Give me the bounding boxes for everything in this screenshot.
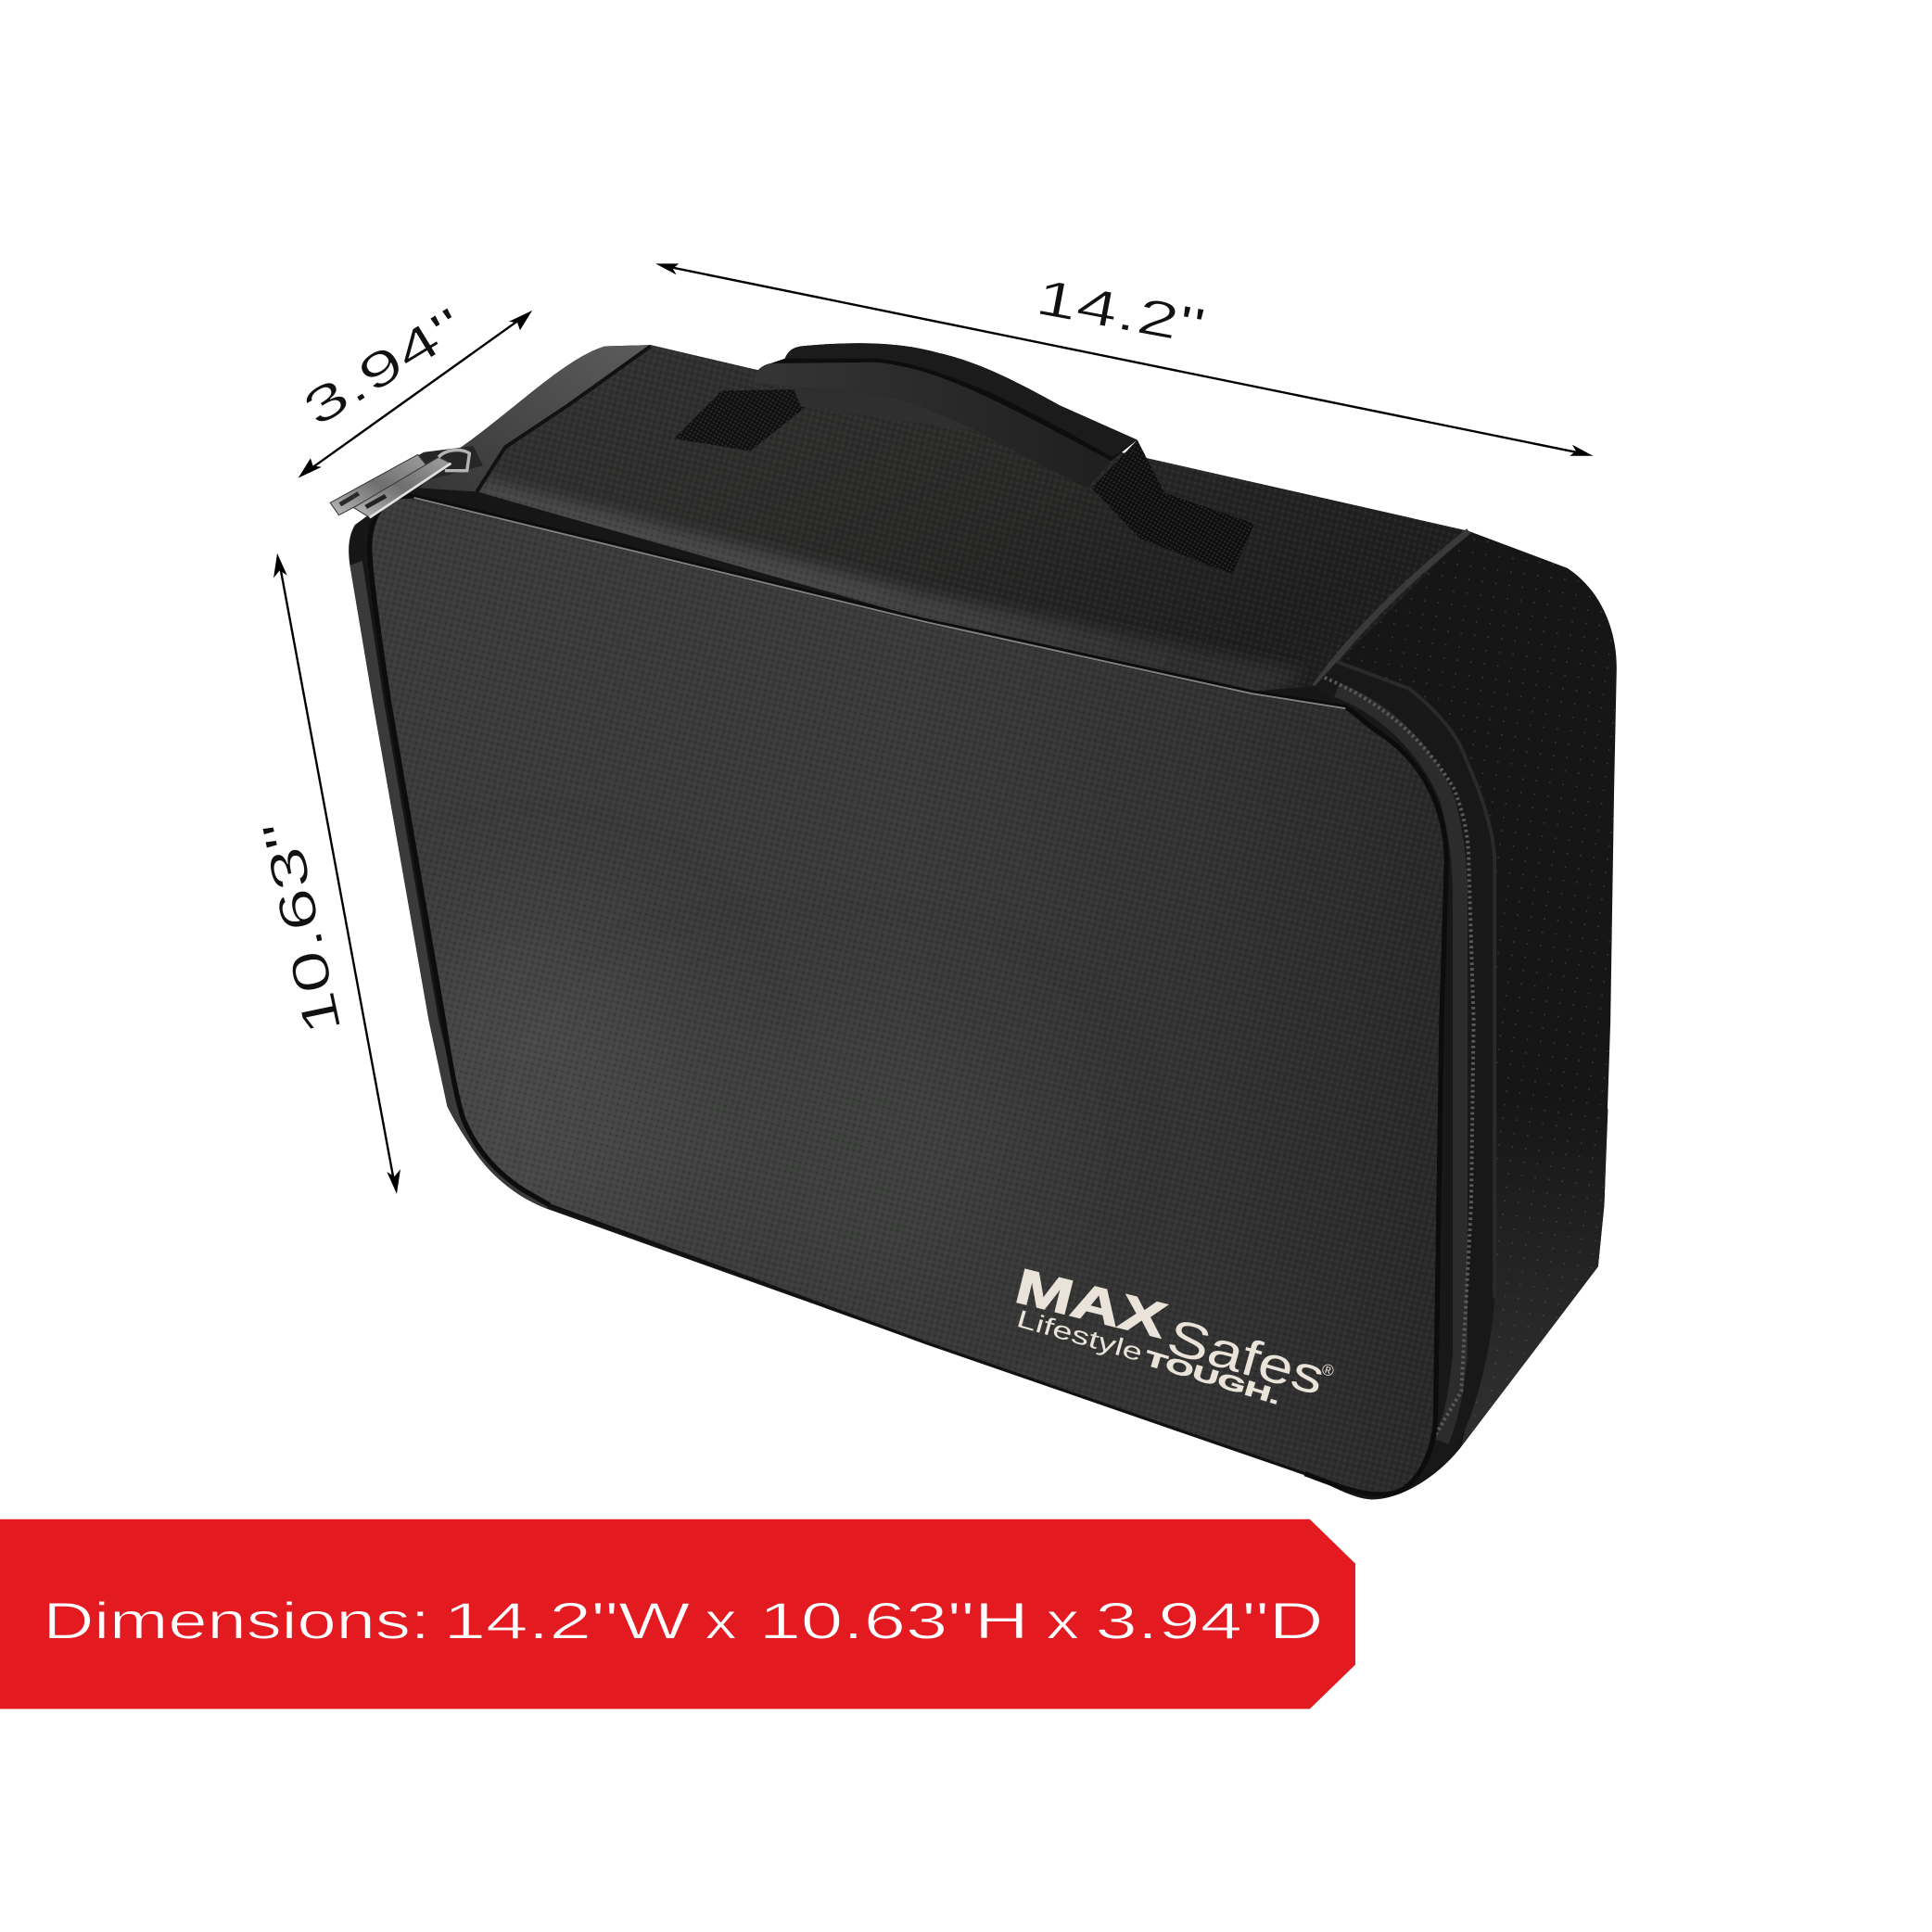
right strap weave xyxy=(1092,439,1254,574)
slider ring xyxy=(439,451,469,471)
red dimensions banner xyxy=(0,1519,1355,1709)
zipper teeth xyxy=(1325,678,1474,1467)
banner shape xyxy=(0,1519,1355,1709)
handle backing xyxy=(753,343,1138,488)
top panel lighting xyxy=(479,347,1463,691)
width arrow head right xyxy=(1570,445,1594,456)
dimension: depth 3.94 inches xyxy=(294,298,532,478)
left strap of handle xyxy=(674,389,805,451)
right seam xyxy=(1315,531,1468,686)
depth arrow xyxy=(299,311,532,478)
slider body xyxy=(401,446,483,480)
lower side panel lighter weave xyxy=(1461,1109,1608,1446)
width arrow xyxy=(655,263,1594,456)
width arrow head left xyxy=(655,263,679,274)
height arrow xyxy=(273,553,400,1194)
width value: 14.2"W xyxy=(443,1592,691,1650)
handle front grip xyxy=(753,362,1112,488)
pull two edge highlight xyxy=(370,464,451,517)
banner text xyxy=(44,1592,1323,1650)
second multiply sign: x xyxy=(1046,1592,1079,1650)
outer zipper seam xyxy=(1337,662,1494,1298)
front panel xyxy=(370,496,1446,1494)
zipper tape highlight xyxy=(1337,690,1460,1442)
front piping xyxy=(370,496,1446,1494)
registered mark: ® xyxy=(1320,1359,1336,1380)
front panel weave xyxy=(357,480,1467,1516)
depth arrow line xyxy=(308,317,524,471)
Lifestyle: Lifestyle xyxy=(1014,1304,1146,1366)
pull one xyxy=(330,454,429,515)
MAX: MAX xyxy=(1010,1259,1172,1349)
depth arrow head lower xyxy=(299,458,322,478)
left edge band xyxy=(350,561,550,1209)
height arrow head top xyxy=(273,553,287,578)
zipper band xyxy=(1315,662,1494,1493)
depth label: 3.94" xyxy=(294,298,474,437)
left strap weave xyxy=(674,389,805,451)
TOUGH.: TOUGH. xyxy=(1142,1346,1283,1409)
zipper pulls xyxy=(330,446,483,517)
height label: 10.63" xyxy=(250,816,352,1040)
side panel texture xyxy=(1337,531,1617,1446)
piping highlight xyxy=(414,498,1345,708)
Dimensions label: Dimensions: xyxy=(44,1592,430,1650)
lower-left highlight xyxy=(443,946,640,1224)
height value: 10.63"H xyxy=(759,1592,1029,1650)
lower-centre highlight xyxy=(579,1023,1048,1269)
width label: 14.2" xyxy=(1032,268,1209,355)
front panel lighting xyxy=(357,480,1467,1516)
surface under handle arc xyxy=(789,375,998,434)
height arrow line xyxy=(280,565,394,1183)
right strap of handle xyxy=(1092,439,1254,574)
pull two slot xyxy=(364,494,387,509)
product: black document bag xyxy=(330,333,1617,1516)
infographic canvas xyxy=(0,263,1617,1710)
pull two xyxy=(353,457,451,517)
width arrow line xyxy=(666,266,1582,453)
top panel weave xyxy=(468,333,1479,703)
logo xyxy=(1010,1259,1336,1409)
depth arrow head upper xyxy=(509,311,532,330)
dimension: width 14.2 inches xyxy=(655,263,1594,456)
handle rear ridge xyxy=(785,343,1138,457)
height arrow head bottom xyxy=(387,1169,400,1194)
bag silhouette and right side panel xyxy=(349,345,1617,1499)
pull one slot xyxy=(338,491,360,506)
multiply sign: x xyxy=(705,1592,737,1650)
depth value: 3.94"D xyxy=(1096,1592,1323,1650)
left end strip xyxy=(419,345,651,491)
glossy band along piping xyxy=(477,477,1306,708)
front bottom edge xyxy=(550,1205,1304,1474)
top panel xyxy=(477,345,1468,692)
dimension: height 10.63 inches xyxy=(250,553,400,1194)
left seam xyxy=(477,346,651,491)
Safes: Safes xyxy=(1162,1308,1331,1406)
